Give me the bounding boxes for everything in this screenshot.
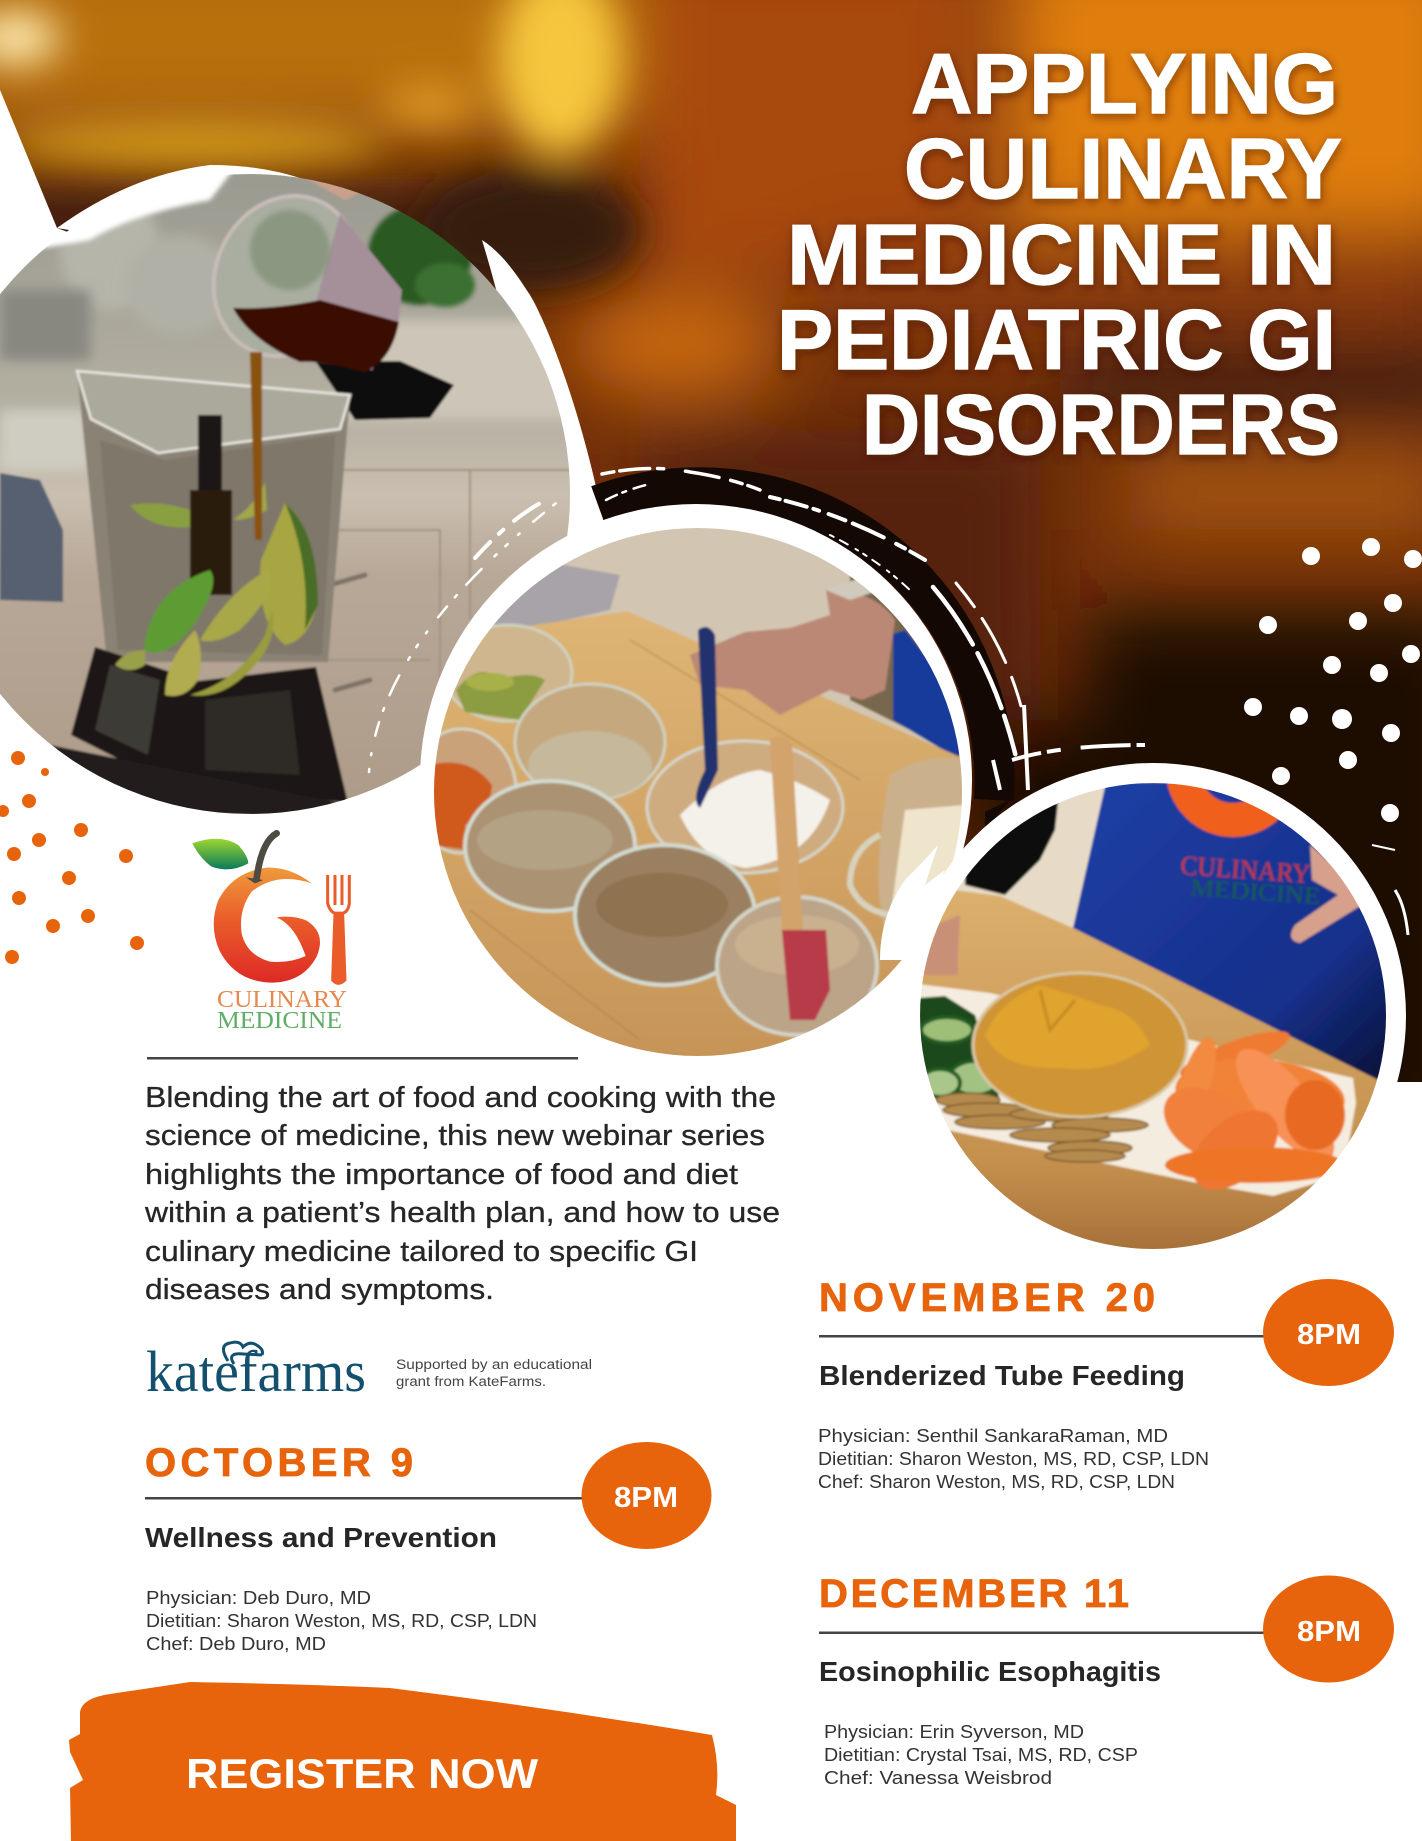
title xyxy=(777,37,1342,473)
blender base xyxy=(71,647,348,803)
session: November 20: Dietitian: Sharon Weston, MS, RD, CSP, LDN xyxy=(818,1449,1209,1469)
session: December 11: 8PM xyxy=(1297,1616,1361,1648)
dark brush stroke around circle 2 xyxy=(598,468,1022,800)
apron logo: CULINARY xyxy=(1180,850,1311,889)
session: November 20: Chef: Sharon Weston, MS, RD, CSP, LDN xyxy=(818,1472,1175,1492)
spoon xyxy=(696,627,718,808)
white dots decoration xyxy=(1244,538,1422,822)
register now banner: REGISTER NOW xyxy=(186,1750,538,1797)
center post xyxy=(198,415,222,495)
intro paragraph: within a patient’s health plan, and how to use xyxy=(144,1197,780,1229)
session: October 9: Dietitian: Sharon Weston, MS, RD, CSP, LDN xyxy=(146,1611,537,1631)
carrots xyxy=(1162,1029,1346,1190)
brown soup bowl xyxy=(575,845,755,985)
logo: GI Culinary Medicine xyxy=(192,833,349,1034)
session: October 9: 8PM xyxy=(614,1482,678,1514)
photo circle: blender with avocado xyxy=(0,165,580,820)
orange dots decoration xyxy=(0,751,144,964)
cucumbers xyxy=(918,996,1001,1105)
orange sauce bowl xyxy=(434,726,518,856)
intro paragraph: Blending the art of food and cooking with the xyxy=(145,1082,776,1114)
avocado xyxy=(130,503,190,527)
blender jar xyxy=(77,371,350,662)
spatula xyxy=(770,736,830,1020)
measuring cup xyxy=(211,193,347,358)
title: MEDICINE IN xyxy=(787,208,1336,303)
session: November 20: Blenderized Tube Feeding xyxy=(819,1360,1185,1391)
photo circle: hummus and carrot plate xyxy=(920,783,1386,1249)
session: December 11: Dietitian: Crystal Tsai, MS, RD, CSP xyxy=(824,1745,1138,1765)
tan soup bowl xyxy=(465,781,635,911)
grant note: grant from KateFarms. xyxy=(396,1374,546,1389)
wood table xyxy=(915,885,1390,1255)
hands xyxy=(1291,845,1362,943)
photo circle: bowls on cutting board xyxy=(408,520,970,1060)
register now banner xyxy=(69,1682,736,1841)
clear bowl xyxy=(717,897,877,1035)
amber stream xyxy=(250,352,262,540)
hummus bowl xyxy=(973,973,1187,1117)
white ring around circle 2 xyxy=(420,504,972,1056)
plate xyxy=(918,984,1356,1196)
measuring cup xyxy=(850,758,965,930)
black sleeve xyxy=(964,803,1060,896)
session: November 20: 8PM xyxy=(1297,1319,1361,1351)
grant note: Supported by an educational xyxy=(396,1357,592,1372)
intro paragraph: highlights the importance of food and diet xyxy=(145,1159,738,1191)
title: CULINARY xyxy=(904,122,1342,217)
blue apron xyxy=(1073,782,1390,1086)
hand xyxy=(690,590,895,715)
cutting board xyxy=(430,611,970,1060)
session: December 11: DECEMBER 11 xyxy=(819,1572,1129,1616)
session: December 11: Eosinophilic Esophagitis xyxy=(819,1656,1161,1687)
background photo: blurred restaurant xyxy=(0,0,1422,1150)
cabinet doors xyxy=(329,468,569,678)
session: October 9: OCTOBER 9 xyxy=(145,1441,413,1485)
title: PEDIATRIC GI xyxy=(777,293,1336,388)
white ring around circle 3 xyxy=(880,705,1408,1269)
intro paragraph: culinary medicine tailored to specific GI xyxy=(145,1236,698,1268)
session: November 20: NOVEMBER 20 xyxy=(819,1276,1155,1320)
title: DISORDERS xyxy=(862,378,1340,473)
crackers xyxy=(936,1093,1148,1162)
session: October 9: Chef: Deb Duro, MD xyxy=(146,1634,326,1654)
logo: GI Culinary Medicine: CULINARY xyxy=(217,987,347,1013)
intro paragraph: diseases and symptoms. xyxy=(145,1274,494,1306)
intro paragraph xyxy=(144,1082,780,1306)
dark brush accents near circle 3 xyxy=(985,745,1145,830)
session: October 9: Physician: Deb Duro, MD xyxy=(146,1588,371,1608)
session: December 11: Chef: Vanessa Weisbrod xyxy=(824,1768,1052,1788)
title: APPLYING xyxy=(911,37,1338,132)
session: October 9: Wellness and Prevention xyxy=(145,1522,497,1553)
session: December 11: Physician: Erin Syverson, MD xyxy=(824,1722,1084,1742)
grant note xyxy=(396,1357,592,1389)
apron logo: MEDICINE xyxy=(1190,875,1321,910)
logo: GI Culinary Medicine: MEDICINE xyxy=(217,1008,342,1034)
white glare xyxy=(42,174,234,252)
session: December 11 xyxy=(819,1572,1394,1788)
white flecks over blender photo xyxy=(369,495,560,772)
session: October 9 xyxy=(145,1441,712,1654)
avocado bowl xyxy=(444,625,572,721)
sesame bowl xyxy=(515,684,665,800)
intro paragraph: science of medicine, this new webinar series xyxy=(145,1120,765,1152)
yogurt bowl xyxy=(647,741,843,873)
session: November 20 xyxy=(818,1276,1394,1492)
plant xyxy=(368,205,475,307)
logo: KateFarms: katefarms xyxy=(146,1339,366,1404)
session: November 20: Physician: Senthil SankaraRaman, MD xyxy=(818,1426,1168,1446)
divider under logo xyxy=(147,1057,578,1060)
apron logo xyxy=(1165,783,1320,905)
